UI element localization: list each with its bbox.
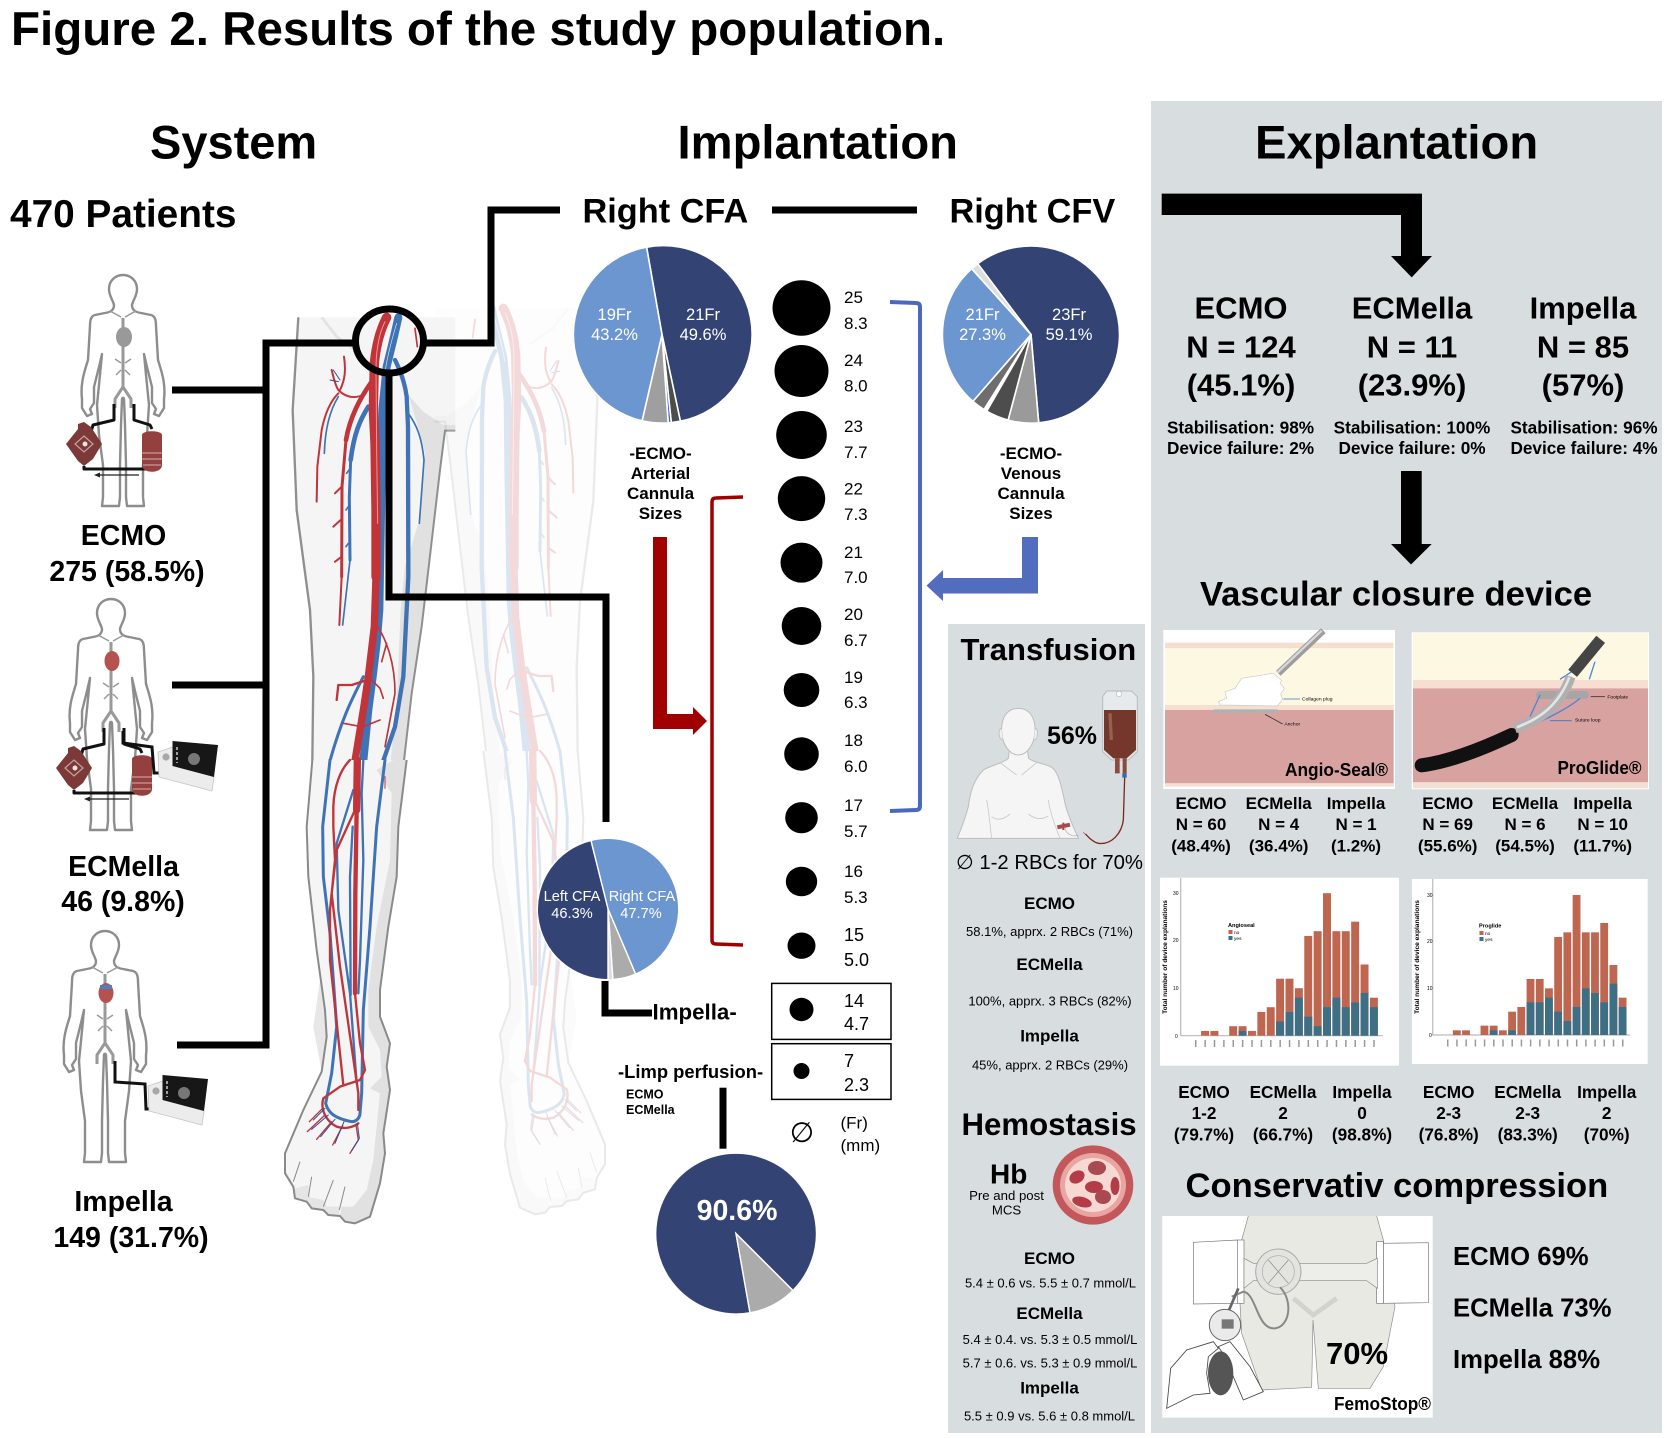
transfusion by system: ECMO [1024,894,1075,913]
Angio-Seal counts: N = 60 [1176,815,1226,834]
ProGlide counts: ECMella [1492,794,1559,813]
patient body [957,750,1078,838]
legend: no [1485,932,1491,937]
caption: venous cannula sizes [997,444,1065,523]
size values: 4.7 [844,1014,869,1034]
explantation reasons [1167,417,1658,458]
y axis ticks: 10 [1427,986,1433,992]
system label: ECMella: ECMella [68,851,180,883]
explantation counts: Impella: (57%) [1542,368,1624,403]
Angio-Seal counts: (48.4%) [1171,837,1231,856]
closures per device: Angio-Seal: ECMO [1178,1082,1230,1102]
size values: 17 [844,796,863,815]
tourniquet and catheter [1057,825,1070,827]
pie labels: 27.3% [959,326,1006,344]
hemoglobin label: Hb [990,1158,1027,1189]
compression arch [1244,1258,1377,1288]
Angio-Seal counts [1171,794,1386,856]
ProGlide counts: (54.5%) [1495,837,1555,856]
transfusion by system: ECMella [1016,955,1083,974]
pie labels: Left CFA [544,889,601,905]
Angio-Seal counts: ECMO [1176,794,1226,813]
heart [116,327,132,347]
pie labels: Right CFA [609,889,676,905]
size values: 7.3 [844,505,868,524]
hemoglobin label: Pre and post [969,1188,1044,1203]
label: limb perfusion systems: ECMella [626,1103,676,1117]
y axis ticks: 30 [1173,891,1179,897]
hemoglobin label [969,1158,1044,1218]
panel: transfusion and hemostasis background [948,624,1145,1433]
pie labels: 21Fr [966,306,1000,324]
transfusion by system: Impella [1020,1026,1079,1046]
hands [1167,1342,1263,1408]
caption: arterial cannula sizes: Sizes [639,504,682,523]
pie labels: 19Fr [598,306,632,324]
Angio-Seal counts: ECMella [1246,794,1312,813]
explantation counts: Impella: N = 85 [1537,329,1629,364]
closures per device: Angio-Seal: 1-2 [1192,1103,1216,1123]
legend: Angioseal [1228,923,1255,929]
pie labels [591,306,727,344]
transfusion mean: ∅ 1-2 RBCs for 70% [956,852,1143,874]
suture loop [1527,662,1595,727]
red blood cells [1067,1161,1120,1209]
label: ProGlide: ProGlide® [1558,758,1642,778]
silver shaft [1515,677,1571,728]
connector: systems to leg [172,343,354,1045]
caption: arterial cannula sizes: Cannula [627,484,695,503]
blood bag [1103,691,1137,760]
bracket: arterial size range [712,497,743,945]
size values: 8.0 [844,376,868,395]
size values: 19 [844,668,863,687]
system label: ECMella: 46 (9.8%) [61,886,185,918]
annotation labels [1284,697,1333,728]
system label: Impella: 149 (31.7%) [53,1222,209,1254]
heading: Transfusion: Transfusion [960,632,1136,667]
y axis label: Total number of device explanations [1162,900,1169,1014]
transfusion by system: 100%, apprx. 3 RBCs (82%) [968,994,1132,1008]
connector: ring to Right CFA [425,210,560,343]
size circles [772,280,830,1079]
scale legend [790,1114,880,1155]
annotation labels: Collagen plug [1302,697,1333,703]
annotation lines [1283,698,1300,700]
size values: 16 [844,862,863,881]
pie labels: 46.3% [551,906,593,922]
ECMella circuit [56,728,152,802]
delivery shaft [1278,631,1323,673]
heart [104,651,120,671]
belts [1193,1240,1428,1304]
ECMO circuit [66,404,162,478]
system label: Impella: Impella [74,1186,174,1218]
scale legend: (mm) [840,1136,880,1155]
explantation reasons: Device failure: 2% [1167,438,1314,458]
caption: arterial cannula sizes: -ECMO- [629,444,692,463]
heading: Conservativ compression: Conservativ compression [1186,1167,1608,1205]
Impella console [158,741,218,791]
device lead [115,1061,157,1109]
legend [1228,923,1255,942]
size values: 5.0 [844,950,869,970]
ProGlide counts: ECMO [1422,794,1473,813]
faded mirrored leg [435,308,605,1214]
scale legend: ∅ [790,1116,814,1149]
label: Impella: Impella- [652,1000,737,1024]
pie labels: 49.6% [680,326,727,344]
closures per device: Angio-Seal: Impella [1332,1082,1392,1102]
pie chart: arterial cannula sizes [573,246,752,423]
section heading: Implantation: Implantation [678,116,958,170]
ProGlide counts: (11.7%) [1573,837,1632,856]
y axis ticks: 20 [1173,938,1179,944]
compression dome [1256,1249,1301,1294]
transfusion by system: 45%, apprx. 2 RBCs (29%) [972,1058,1128,1072]
size values: 6.7 [844,631,868,650]
closures per device: ProGlide: (83.3%) [1498,1125,1558,1145]
ProGlide counts: (55.6%) [1418,837,1477,856]
closures per device: Angio-Seal: ECMella [1250,1082,1317,1102]
closures per device: Angio-Seal [1174,1082,1392,1145]
arrow: to vascular closure device [1391,471,1432,564]
compression by system [1453,1243,1612,1374]
connector: Right CFA to Right CFV [772,206,917,214]
size values: 20 [844,605,863,624]
system label: ECMO [49,520,205,588]
size values: 23 [844,417,863,436]
explantation reasons: Stabilisation: 96% [1510,417,1658,437]
hemoglobin by system: 5.7 ± 0.6. vs. 5.3 ± 0.9 mmol/L [963,1356,1137,1370]
illustration: FemoStop [1162,1216,1433,1418]
closures per device: ProGlide: 2-3 [1515,1103,1540,1123]
inflation bulb [1208,1351,1233,1395]
hemoglobin by system: 5.4 ± 0.6 vs. 5.5 ± 0.7 mmol/L [965,1276,1136,1291]
label: FemoStop: FemoStop® [1334,1394,1431,1414]
Angio-Seal counts: (1.2%) [1331,837,1381,856]
footplate [1540,683,1585,707]
system label: ECMO: 275 (58.5%) [49,556,205,588]
hemoglobin label: MCS [992,1203,1021,1218]
closures per device: ProGlide: Impella [1577,1082,1637,1102]
heading: Hemostasis: Hemostasis [962,1107,1137,1142]
closures per device: Angio-Seal: (79.7%) [1174,1125,1234,1145]
size values: 6.0 [844,757,868,776]
explantation reasons: Stabilisation: 100% [1334,417,1490,437]
boxes: Impella and limb perfusion sizes [772,983,891,1099]
anchor [1213,709,1278,713]
y axis ticks: 0 [1175,1034,1178,1040]
explantation counts: ECMO [1186,291,1296,403]
hemoglobin by system: 5.4 ± 0.4. vs. 5.3 ± 0.5 mmol/L [963,1332,1137,1347]
connector: ring to Impella pie [389,375,606,822]
annotation lines [1591,695,1605,698]
system: ECMella figure [56,599,218,830]
caption: arterial cannula sizes: Arterial [631,464,690,483]
explantation counts: ECMO: ECMO [1194,291,1288,326]
Angio-Seal counts: N = 4 [1258,815,1300,834]
heading: Right CFV: Right CFV [950,192,1115,230]
bars: yes [1490,984,1627,1035]
system label: Impella [53,1186,209,1254]
ProGlide counts: N = 6 [1504,815,1546,834]
air tube [1232,1287,1288,1328]
size values: 7 [844,1051,854,1071]
explantation counts: ECMella: (23.9%) [1358,368,1466,403]
legend: yes [1234,937,1242,942]
ProGlide counts: N = 10 [1577,815,1628,834]
transfusion by system: 58.1%, apprx. 2 RBCs (71%) [966,924,1133,939]
y axis ticks: 30 [1427,893,1433,899]
explantation counts: Impella: Impella [1530,291,1637,326]
closures per device: ProGlide: (76.8%) [1419,1125,1479,1145]
size values: 22 [844,480,863,498]
ProGlide counts: Impella [1573,794,1633,813]
closures per device: ProGlide [1419,1082,1637,1145]
ProGlide counts: N = 69 [1422,815,1473,834]
label: limb perfusion: -Limp perfusion- [618,1061,763,1082]
system label: ECMO: ECMO [81,520,166,552]
ProGlide counts [1418,794,1633,856]
pie chart: limb perfusion [656,1153,816,1314]
explantation counts: Impella [1530,291,1637,403]
y axis ticks [1427,893,1433,1039]
closures per device: ProGlide: ECMO [1423,1082,1474,1102]
pie labels: 43.2% [591,326,638,344]
catheter tip [1422,735,1512,765]
closures per device: Angio-Seal: 2 [1278,1103,1288,1123]
pie labels [959,306,1093,344]
vessel access ring [356,309,424,373]
size values: 14 [844,991,864,1011]
pie chart: Impella access site [537,838,679,980]
pie chart: venous cannula sizes [942,246,1120,423]
closures per device: ProGlide: 2-3 [1436,1103,1461,1123]
proximal shaft [1573,639,1601,673]
Angio-Seal counts: (36.4%) [1249,837,1308,856]
caption: arterial cannula sizes [627,444,695,523]
hemoglobin by system: 5.5 ± 0.9 vs. 5.6 ± 0.8 mmol/L [964,1409,1135,1424]
pie value: 90.6% [697,1195,777,1227]
label: limb perfusion systems [626,1088,676,1117]
legend: no [1234,931,1240,936]
legend: yes [1485,938,1493,943]
size values: 24 [844,351,863,370]
transfusion by system [966,894,1133,1072]
bars: yes [1239,993,1378,1036]
connector: limb perfusion to pie [720,1088,726,1149]
label: Angio-Seal: Angio-Seal® [1285,760,1388,780]
hemoglobin by system: Impella [1020,1379,1079,1398]
explantation reasons: Device failure: 0% [1338,438,1486,458]
size values [844,288,869,1095]
y axis ticks: 0 [1429,1033,1432,1039]
size values: 25 [844,288,863,307]
bracket: venous size range [890,302,920,811]
annotation labels: Footplate [1607,694,1628,700]
size values: 7.0 [844,568,868,587]
explantation counts: ECMO: N = 124 [1186,329,1296,364]
title: Figure 2. Results of the study population. [11,3,945,56]
section heading: System: System [150,116,317,168]
y axis ticks [1173,891,1179,1040]
compression by system: ECMella 73% [1453,1295,1612,1323]
pressure gauge [1228,1288,1238,1312]
heading: Vascular closure device: Vascular closure device [1200,576,1592,614]
label: limb perfusion systems: ECMO [626,1088,664,1102]
explantation counts: ECMella: N = 11 [1367,329,1457,364]
system: ECMO figure [66,275,164,506]
explantation reasons: Device failure: 4% [1510,438,1658,458]
patient total: 470 Patients [10,193,236,236]
caption: venous cannula sizes: -ECMO- [1000,444,1062,463]
pelvis [1240,1216,1395,1390]
pie labels: 59.1% [1046,326,1093,344]
pie labels [544,889,676,922]
scale legend: (Fr) [840,1114,868,1133]
infusion tube [1122,773,1127,778]
heading: Right CFA: Right CFA [582,192,748,230]
arrow: arterial sizes to scale [653,537,707,735]
compression by system: Impella 88% [1453,1346,1600,1374]
heart [98,983,114,1003]
cannula size scale [772,280,891,1155]
bars: no [1453,895,1627,1035]
explantation counts: ECMO: (45.1%) [1187,368,1295,403]
collagen plug [1218,673,1284,706]
y axis ticks: 20 [1427,939,1433,945]
size values: 2.3 [844,1075,869,1095]
bars: no [1201,893,1378,1036]
size values: 7.7 [844,443,868,462]
arrow: venous sizes to scale [926,537,1038,601]
y axis label: Total number of device explanations [1414,900,1421,1014]
caption: venous cannula sizes: Cannula [997,484,1065,503]
bar chart: Angioseal [1160,878,1399,1066]
size values: 5.3 [844,888,868,907]
section heading: Explantation: Explantation [1255,116,1538,170]
size values: 21 [844,543,863,562]
icon: red blood cells in vessel [1053,1145,1133,1225]
size values: 18 [844,731,863,750]
closures per device: ProGlide: ECMella [1494,1082,1562,1102]
pie labels: 21Fr [686,306,720,324]
compression success: 70% [1326,1336,1388,1371]
closures per device: ProGlide: 2 [1602,1103,1611,1123]
leg anatomy illustration [285,308,605,1223]
y axis ticks: 10 [1173,986,1179,992]
illustration: transfused patient [957,691,1137,843]
system: Impella figure [64,931,208,1162]
closures per device: Angio-Seal: (98.8%) [1332,1125,1392,1145]
explantation counts: ECMella: ECMella [1352,291,1473,326]
system label: ECMella [61,851,185,918]
hemoglobin by system: ECMO [1024,1249,1075,1268]
legend: Proglide [1479,924,1501,930]
legend [1479,924,1501,943]
illustration: Angio-Seal [1163,630,1395,789]
Angio-Seal counts: Impella [1327,794,1386,813]
explantation counts: ECMella [1352,291,1473,403]
annotation labels: Suture loop [1575,718,1601,724]
size values: 15 [844,925,864,945]
hemoglobin by system [963,1249,1137,1424]
Angio-Seal counts: N = 1 [1335,815,1377,834]
annotation labels: Anchor [1284,722,1300,728]
caption: venous cannula sizes: Venous [1001,464,1061,483]
closures per device: Angio-Seal: (66.7%) [1253,1125,1313,1145]
explantation reasons: Stabilisation: 98% [1167,417,1314,437]
panel: explantation background [1151,101,1662,1433]
hemoglobin by system: ECMella [1016,1304,1083,1323]
closures per device: ProGlide: (70%) [1584,1125,1630,1145]
device lead [123,731,166,773]
bar chart: Proglide [1412,879,1648,1064]
size values: 5.7 [844,822,868,841]
size values: 6.3 [844,693,868,712]
pie labels: 23Fr [1052,306,1086,324]
arrow: implantation to explantation [1162,194,1432,277]
connector: Impella pie to label [605,981,652,1013]
annotation labels [1575,694,1628,724]
patient head [1002,708,1035,755]
size values: 8.3 [844,314,868,333]
illustration: ProGlide [1412,632,1649,789]
compression by system: ECMO 69% [1453,1243,1589,1271]
Impella console [148,1075,208,1125]
closures per device: Angio-Seal: 0 [1357,1103,1367,1123]
transfusion rate: 56% [1047,722,1097,750]
groin shadow [1293,1298,1337,1315]
caption: venous cannula sizes: Sizes [1009,504,1053,523]
pie labels: 47.7% [620,906,662,922]
